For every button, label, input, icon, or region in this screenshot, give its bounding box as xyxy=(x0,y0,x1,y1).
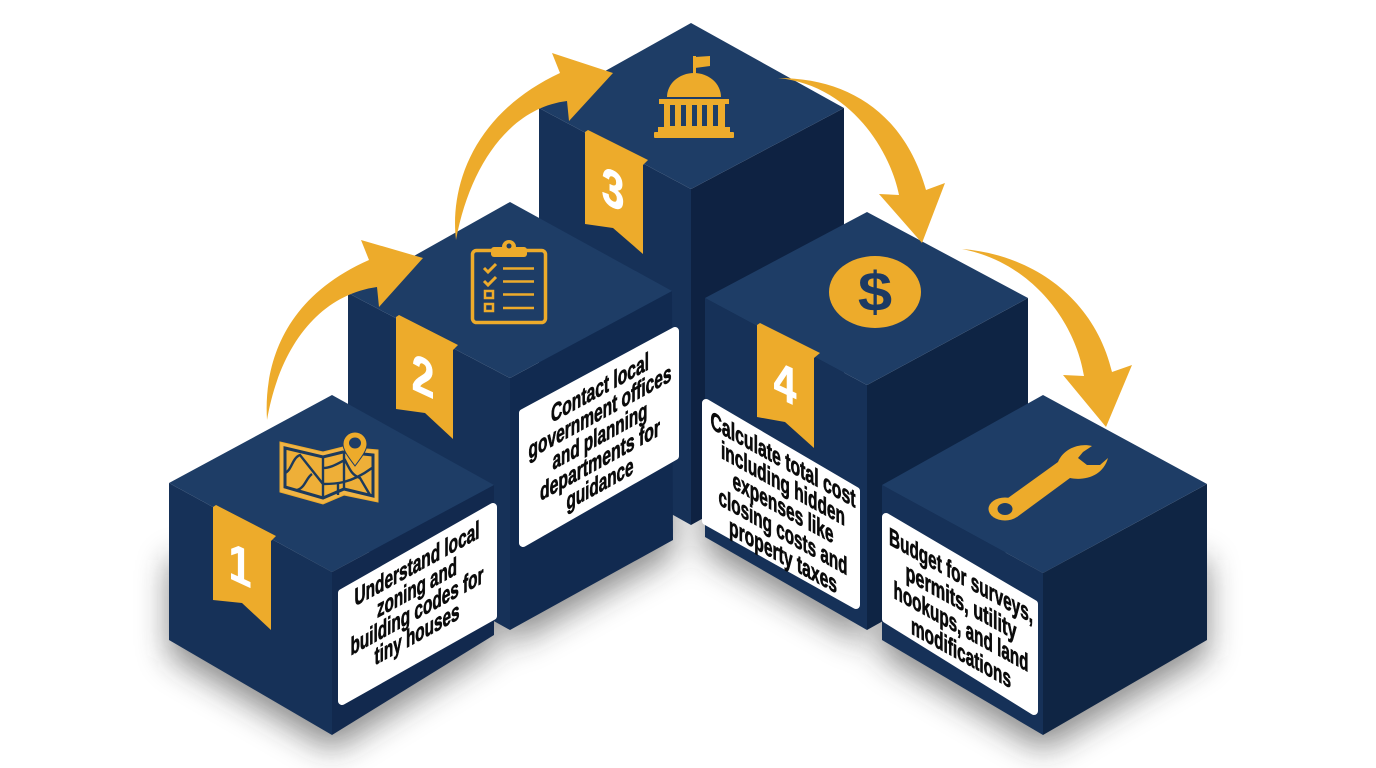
icon: government building xyxy=(654,56,734,138)
label card: step 1 text: tiny houses xyxy=(374,596,460,671)
label card: step 4 text: Calculate total cost xyxy=(710,406,856,513)
banner: number 1 xyxy=(213,505,276,630)
label card: step 4 text: closing costs and xyxy=(718,482,848,581)
label card: step 2 text: and planning xyxy=(552,396,648,476)
label card: step 4 text: property taxes xyxy=(729,512,837,599)
label card: step 4 text: including hidden xyxy=(721,436,845,532)
banner: number 2 xyxy=(396,315,458,439)
arrow: step 4 to step 5 xyxy=(962,249,1132,427)
label card: step 1 text: Understand local xyxy=(354,515,480,612)
panel: step 1 block xyxy=(169,395,494,735)
label card: step 1 text xyxy=(342,507,493,701)
label card: step 2 text: departments for xyxy=(540,412,660,507)
banner: number 1: 1 xyxy=(229,532,251,600)
icon: wrench xyxy=(988,445,1108,520)
panel: step 4 block xyxy=(705,212,1028,630)
ground shadows xyxy=(169,480,1207,750)
arrow: step 1 to step 2 xyxy=(267,240,423,420)
banner: number 2: 2 xyxy=(412,343,434,411)
label card: step 2 text: Contact local xyxy=(551,347,649,429)
label card: step 5 text: modifications xyxy=(911,611,1011,694)
label card: step 5 text xyxy=(886,517,1034,711)
banner: number 4 xyxy=(757,323,820,448)
label card: step 2 text xyxy=(523,331,675,543)
label card: step 5 text: permits, utility xyxy=(906,557,1017,646)
icon: map with pin xyxy=(280,432,378,504)
arrow: step 3 to step 4 xyxy=(778,78,945,243)
label card: step 2 text: guidance xyxy=(566,451,634,516)
label card: step 4 text: expenses like xyxy=(732,466,834,549)
panel: step 5 block xyxy=(882,395,1207,735)
banner: number 3: 3 xyxy=(602,156,624,224)
label card: step 1 text: building codes for xyxy=(350,560,484,661)
arrow: step 2 to step 3 xyxy=(455,53,613,240)
icon: clipboard checklist xyxy=(472,240,546,322)
icon: dollar coin: $ xyxy=(858,262,892,323)
panel: step 3 block xyxy=(539,23,844,525)
banner: number 4: 4 xyxy=(774,350,796,418)
panel: step 2 block xyxy=(348,202,675,630)
label card: step 5 text: hookups, and land xyxy=(894,576,1028,678)
icon: dollar coin xyxy=(829,256,921,328)
label card: step 4 text xyxy=(706,403,856,609)
label card: step 5 text: Budget for surveys, xyxy=(889,522,1033,629)
banner: number 3 xyxy=(585,130,648,254)
label card: step 2 text: government offices xyxy=(528,358,672,465)
label card: step 1 text: zoning and xyxy=(377,552,457,624)
